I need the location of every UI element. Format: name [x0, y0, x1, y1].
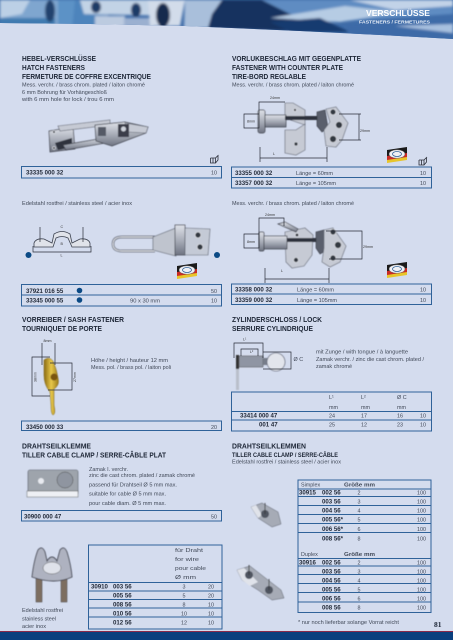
footer band	[0, 631, 453, 640]
table: 30910: 10	[208, 620, 214, 626]
heading: cylinder lock: ZYLINDERSCHLOSS / LOCK	[232, 315, 322, 324]
table: 33358 / 33359	[231, 284, 432, 304]
table: simplex / duplex: 008 56*	[322, 535, 344, 542]
table: 30910: Ø mm	[175, 575, 197, 581]
table: simplex / duplex: 100	[417, 569, 426, 575]
image: lock with dimensions	[234, 338, 303, 390]
image: duplex clamp	[237, 565, 284, 600]
table: simplex / duplex: 100	[417, 500, 426, 506]
panel: stainless tiller cable clamps	[232, 442, 431, 626]
table: 33414: mm	[329, 405, 338, 411]
table: 33355 / 33357: 33355 000 32	[235, 170, 273, 177]
description: flat clamp: pour cable diam. Ø 5 mm max.	[89, 501, 166, 507]
table: 37921 / 33345: 50	[211, 289, 217, 295]
table: 33355 / 33357: Länge = 105mm	[296, 181, 337, 187]
table: simplex / duplex: 5	[358, 518, 360, 524]
image: fastener 33355 with dimensions: 29mm	[360, 129, 370, 133]
table: 30910: for wire	[175, 557, 199, 563]
table: 33414: L²	[361, 395, 366, 401]
table: simplex / duplex: 100	[417, 490, 426, 496]
image: brass fastener with dimensions: 8mm	[44, 339, 52, 343]
table: 33358 / 33359: Länge = 105mm	[297, 298, 338, 304]
heading: hatch fasteners	[22, 54, 151, 81]
description: hatch fasteners: Mess. verchr. / brass chrom. plated / laiton chromé	[22, 82, 145, 88]
table: simplex / duplex: 100	[417, 578, 426, 584]
table: 33414: mm	[397, 405, 406, 411]
description: lock	[316, 350, 425, 370]
section title	[359, 8, 431, 26]
material note	[22, 608, 63, 630]
heading: tiller cable clamp: TILLER CABLE CLAMP / SERRE-CÂBLE PLAT	[22, 450, 166, 460]
marker 1	[26, 252, 32, 258]
table: 33414: 23	[397, 422, 403, 428]
table: simplex / duplex: 002 56	[322, 559, 341, 566]
table: simplex / duplex: 005 56*	[322, 517, 344, 524]
table: simplex / duplex: 002 56	[322, 490, 341, 496]
material note: Edelstahl rostfrei	[22, 608, 63, 614]
panel: cylinder lock	[231, 315, 432, 431]
description: hatch fasteners: 6 mm Bohrung für Vorhängeschloß	[22, 90, 108, 96]
description: flat clamp: zinc die cast chrom. plated / zamak chromé	[89, 473, 195, 479]
table: 30910: pour cable	[175, 566, 206, 572]
table: simplex / duplex: 100	[417, 518, 426, 524]
image: fastener 33355 with dimensions: 24mm	[270, 96, 280, 100]
heading: hatch fasteners: HEBEL-VERSCHLÜSSE	[22, 54, 96, 63]
description: lock: mit Zunge / with tongue / à languette	[316, 350, 408, 356]
table: 33450: 33450 000 33	[26, 424, 64, 431]
material note: Edelstahl rostfrei / stainless steel / acier inox	[22, 201, 132, 207]
heading: stainless clamps: TILLER CABLE CLAMP / SERRE-CÂBLE	[232, 450, 339, 459]
heading: counter plate fastener: TIRE-BORD REGLABLE	[232, 72, 306, 81]
table: simplex / duplex: 30916	[299, 559, 317, 566]
heading: counter plate fastener: VORLUKBESCHLAG MIT GEGENPLATTE	[232, 54, 361, 63]
panel: hatch fasteners	[21, 54, 221, 178]
table: 30910: 3	[182, 584, 186, 590]
table: 33414: 16	[397, 414, 403, 420]
table: 30910: für Draht	[175, 548, 204, 554]
table: 33414: 24	[329, 414, 335, 420]
table: simplex / duplex: 006 56	[322, 595, 341, 602]
table: 37921 / 33345: 10	[211, 298, 217, 304]
table: simplex / duplex: 006 56*	[322, 526, 344, 533]
table: simplex / duplex: 5	[358, 587, 360, 593]
description: lock: zamak chromé	[316, 364, 352, 370]
table: 33414: 25	[329, 422, 335, 428]
table: simplex / duplex: 3	[358, 569, 360, 575]
table: 30910: 10	[208, 602, 214, 608]
table: simplex / duplex: 6	[358, 527, 360, 533]
table: 33414: 10	[420, 422, 426, 428]
table: simplex / duplex: 100	[417, 587, 426, 593]
table: 33414: 17	[361, 414, 367, 420]
image: fastener 33358 with dimensions	[244, 213, 373, 283]
image: hasp	[113, 225, 210, 256]
image: fastener 33358 with dimensions: L	[281, 269, 283, 273]
panel: stainless hasp	[21, 201, 222, 306]
table: 37921 / 33345: 37921 016 55	[26, 288, 64, 295]
heading: tiller cable clamp	[22, 442, 166, 460]
diagram: eye strap with dimensions: C	[60, 225, 64, 229]
table: 33355 / 33357	[231, 167, 432, 188]
table: simplex / duplex: Größe mm	[344, 552, 375, 558]
description: hatch fasteners	[21, 82, 145, 103]
description: sash fastener: Höhe / height / hauteur 12 mm	[91, 358, 169, 364]
heading: hatch fasteners: HATCH FASTENERS	[22, 63, 85, 72]
table: 37921 / 33345: 33345 000 55	[26, 298, 64, 304]
heading: hatch fasteners: FERMETURE DE COFFRE EXCENTRIQUE	[22, 72, 151, 81]
description: sash fastener	[91, 358, 171, 371]
table: 33450	[22, 421, 222, 431]
table: 33414	[231, 392, 432, 431]
image: fastener 33355 with dimensions	[244, 96, 370, 162]
material note: acier inox	[22, 624, 46, 630]
table: simplex / duplex: 100	[417, 596, 426, 602]
heading: tiller cable clamp: DRAHTSEILKLEMME	[22, 442, 91, 450]
table: simplex / duplex: 6	[358, 596, 360, 602]
image: fastener 33358 with dimensions: 8mm	[247, 240, 255, 244]
image: brass fastener with dimensions	[32, 339, 77, 415]
image: fastener 33355 with dimensions: L	[273, 152, 275, 156]
material note: stainless steel	[22, 616, 56, 622]
table: 30910: 30910	[91, 583, 109, 590]
diagram: eye strap with dimensions: B	[60, 242, 64, 246]
table: simplex / duplex: 100	[417, 536, 426, 542]
table: simplex / duplex: 100	[417, 509, 426, 515]
heading: stainless clamps: Edelstahl rostfrei / stainless steel / acier inox	[232, 460, 341, 466]
table: 33355 / 33357: Länge = 60mm	[296, 171, 334, 177]
table: 33355 / 33357: 10	[420, 181, 426, 187]
icon: package	[419, 157, 427, 165]
image: lock with dimensions: L²	[250, 350, 254, 354]
table: 33335: 10	[211, 170, 217, 176]
badge: made in Germany	[177, 263, 197, 279]
table: 30910: 005 56	[113, 592, 132, 600]
heading: stainless clamps	[232, 442, 341, 466]
table: 30900	[22, 510, 222, 521]
table: 33414: 12	[361, 422, 367, 428]
table: 33358 / 33359: 10	[420, 288, 426, 294]
section title: FASTENERS / FERMETURES	[359, 20, 431, 26]
section title: VERSCHLÜSSE	[366, 8, 430, 18]
table: simplex / duplex	[298, 480, 431, 612]
image: lock with dimensions: Ø C	[294, 357, 303, 363]
table: 37921 / 33345: 90 x 30 mm	[130, 298, 161, 304]
badge: made in Germany	[387, 262, 407, 278]
table: simplex / duplex: Duplex	[301, 552, 318, 558]
table: 33450: 20	[211, 425, 217, 431]
table: 30910	[88, 545, 222, 629]
heading: cylinder lock: SERRURE CYLINDRIQUE	[232, 324, 313, 333]
table: simplex / duplex: 004 56	[322, 577, 341, 584]
table: 33414: L¹	[329, 395, 334, 401]
image: brass fastener with dimensions: 38mm	[34, 372, 38, 382]
table: 30910: 20	[208, 594, 214, 600]
image: hatch fastener	[49, 120, 148, 152]
heading: stainless clamps: DRAHTSEILKLEMMEN	[232, 442, 306, 450]
table: simplex / duplex: 4	[358, 509, 360, 515]
table: 33414: Ø C	[397, 395, 407, 401]
table: 33358 / 33359: Länge = 60mm	[297, 288, 335, 294]
table: simplex / duplex: 100	[417, 606, 426, 612]
table: simplex / duplex: 100	[417, 527, 426, 533]
table: 30900: 50	[211, 514, 217, 520]
table: simplex / duplex: 005 56	[322, 586, 341, 593]
table: simplex / duplex: 3	[358, 500, 360, 506]
icon: package	[210, 155, 218, 163]
table: simplex / duplex: 008 56	[322, 605, 341, 612]
table: 33414: 10	[420, 414, 426, 420]
heading: counter plate fastener: FASTENER WITH COUNTER PLATE	[232, 63, 343, 72]
description: flat clamp: suitable for cable Ø 5 mm max.	[89, 492, 166, 498]
table: simplex / duplex: 30915	[299, 490, 317, 496]
table: 33358 / 33359: 33359 000 32	[235, 297, 273, 304]
badge: made in Germany	[387, 147, 407, 163]
heading: sash fastener	[22, 315, 124, 333]
table: 30910: 012 56	[113, 620, 132, 626]
image: lock with dimensions: L¹	[243, 338, 247, 342]
image: wire rope U-bolt clamp	[32, 548, 72, 602]
image: brass fastener with dimensions: 27mm	[73, 372, 77, 382]
table: simplex / duplex: Simplex	[301, 482, 320, 488]
heading: counter plate fastener	[232, 54, 361, 81]
description: brass chrome: Mess. verchr. / brass chrom. plated / laiton chromé	[232, 82, 354, 88]
description: lock: Zamak verchr. / zinc die cast chrom. plated /	[316, 357, 425, 363]
table: 30910: 8	[182, 602, 186, 608]
table: 30910: 12	[181, 620, 187, 626]
table: simplex / duplex: 2	[358, 490, 360, 496]
table: 33414: 001 47	[259, 422, 278, 428]
description: flat clamp: passend für Drahtseil Ø 5 mm max.	[89, 482, 177, 488]
table: 30910: 10	[181, 612, 187, 618]
heading: cylinder lock	[232, 315, 322, 333]
table: 30910: 003 56	[113, 583, 132, 590]
panel: sash fastener	[22, 315, 222, 431]
table: simplex / duplex: 004 56	[322, 508, 341, 515]
table: 30910: 5	[182, 594, 186, 600]
table: 30910: 20	[208, 584, 214, 590]
table: 37921 / 33345	[21, 284, 222, 306]
table: 33335: 33335 000 32	[26, 170, 64, 176]
table: simplex / duplex: 8	[358, 536, 360, 542]
image: fastener 33355 with dimensions: 8mm	[247, 120, 255, 124]
table: simplex / duplex: 8	[358, 606, 360, 612]
page number: 81	[434, 620, 442, 629]
heading: sash fastener: TOURNIQUET DE PORTE	[22, 324, 102, 333]
header photo: sailing	[0, 0, 453, 40]
panel: counter plate fastener	[231, 54, 432, 304]
table: 33414: 33414 000 47	[240, 412, 278, 420]
description: hatch fasteners: with 6 mm hole for lock / trou 6 mm	[21, 97, 115, 103]
image: fastener 33358 with dimensions: 24mm	[265, 213, 275, 217]
footnote: * nur noch lieferbar solange Vorrat reicht	[298, 620, 400, 626]
table: 30910: 10	[208, 612, 214, 618]
table: simplex / duplex: 100	[417, 560, 426, 566]
description: flat clamp	[89, 467, 195, 507]
table: 33355 / 33357: 10	[420, 171, 426, 177]
table: 30910: 010 56	[113, 610, 132, 618]
table: 30900: 30900 000 47	[24, 513, 62, 520]
table: 30910: 008 56	[113, 602, 132, 608]
table: simplex / duplex: 4	[358, 578, 360, 584]
image: simplex clamp	[251, 503, 281, 527]
image: flat clamp	[27, 470, 78, 497]
table: 33335	[22, 166, 222, 178]
table: simplex / duplex: 003 56	[322, 568, 341, 575]
description: brass chrome: Mess. verchr. / brass chrom. plated / laiton chromé	[232, 201, 354, 207]
image: fastener 33358 with dimensions: 29mm	[363, 245, 373, 249]
table: 33358 / 33359: 33358 000 32	[235, 286, 273, 294]
heading: sash fastener: VORREIBER / SASH FASTENER	[22, 315, 124, 324]
table: simplex / duplex: 003 56	[322, 499, 341, 506]
table: simplex / duplex: 2	[358, 560, 360, 566]
table: 33355 / 33357: 33357 000 32	[235, 180, 273, 187]
table: simplex / duplex: Größe mm	[344, 483, 375, 489]
table: 33414: mm	[361, 405, 370, 411]
panel: tiller cable clamp plate	[22, 442, 222, 630]
table: 33358 / 33359: 10	[420, 298, 426, 304]
diagram: eye strap with dimensions	[33, 225, 91, 258]
marker 2	[214, 252, 220, 258]
diagram: eye strap with dimensions: L	[60, 254, 62, 258]
description: sash fastener: Mess. pol. / brass pol. / laiton poli	[91, 365, 171, 371]
description: flat clamp: Zamak I. verchr.	[89, 467, 128, 473]
